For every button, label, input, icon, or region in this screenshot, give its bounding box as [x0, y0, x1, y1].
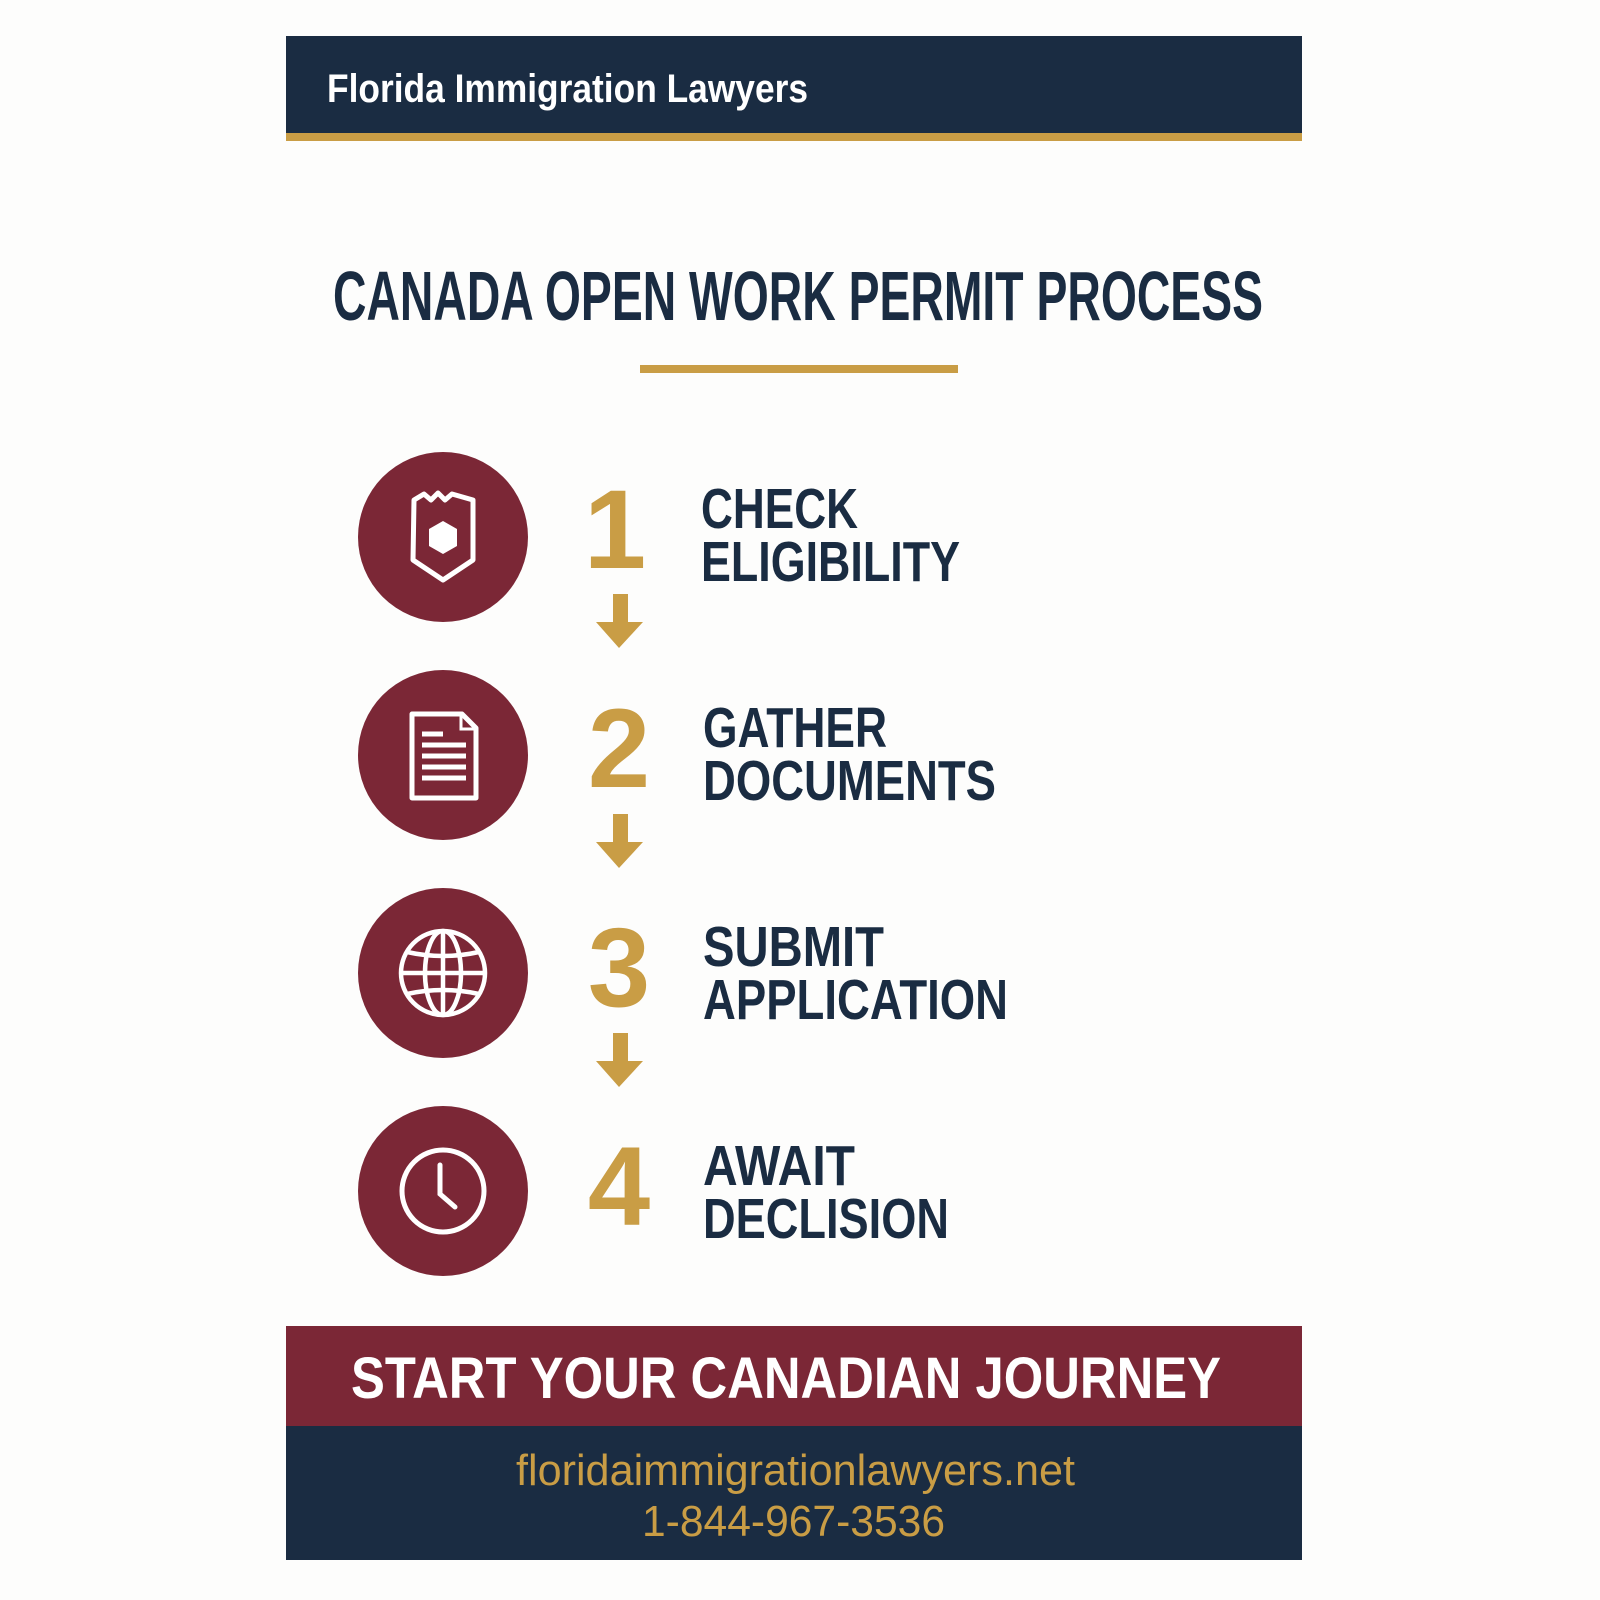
step 1 — [358, 452, 960, 622]
step 1 label: CHECK — [701, 477, 858, 541]
footer CTA banner: START YOUR CANADIAN JOURNEY — [351, 1346, 1221, 1411]
footer contact: 1-844-967-3536 — [642, 1497, 945, 1546]
arrow 3 — [596, 1033, 643, 1087]
step 2 label: DOCUMENTS — [703, 749, 996, 813]
step 2 label: GATHER — [703, 696, 887, 760]
footer contact: floridaimmigrationlawyers.net — [516, 1446, 1075, 1495]
step 4 label: AWAIT — [703, 1134, 855, 1198]
step 4 — [358, 1106, 949, 1276]
step 4 label: DECLISION — [703, 1187, 949, 1251]
number 3: 3 — [588, 905, 650, 1030]
icon: clock — [358, 1106, 528, 1276]
arrow 1 — [596, 594, 643, 648]
arrow 2 — [596, 814, 643, 868]
number 2: 2 — [588, 686, 650, 811]
step 3 label: APPLICATION — [703, 968, 1008, 1032]
step 1 label: ELIGIBILITY — [701, 530, 960, 594]
step 2 — [358, 670, 996, 840]
header bar — [286, 36, 1302, 141]
footer contact — [286, 1426, 1302, 1560]
footer CTA banner — [286, 1326, 1302, 1427]
step 3 — [358, 888, 1008, 1058]
icon: globe — [358, 888, 528, 1058]
step 3 label: SUBMIT — [703, 915, 884, 979]
icon: document — [358, 670, 528, 840]
icon: shield — [358, 452, 528, 622]
number 1: 1 — [584, 467, 646, 592]
header text: Florida Immigration Lawyers — [327, 67, 808, 111]
number 4: 4 — [588, 1124, 650, 1249]
title underline — [640, 365, 958, 373]
